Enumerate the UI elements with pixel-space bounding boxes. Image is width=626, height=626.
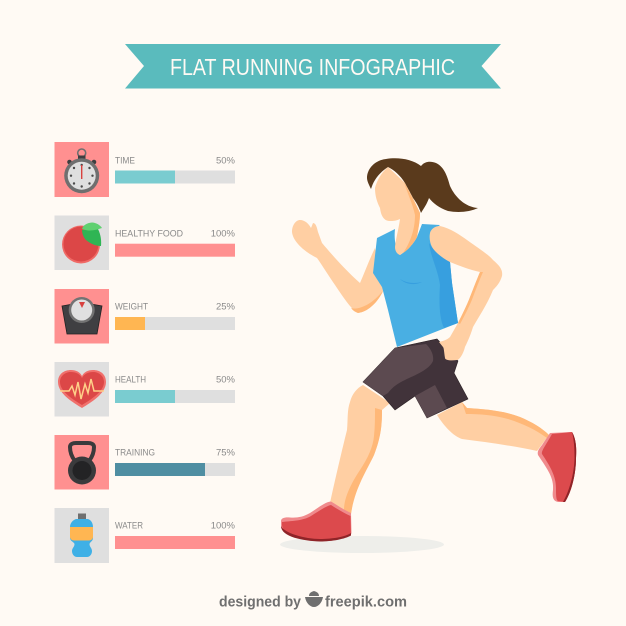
icon: freepik logo <box>305 591 323 607</box>
shorts <box>363 339 468 418</box>
row: time <box>54 142 236 197</box>
row: health: HEALTH <box>115 374 146 386</box>
near arm <box>430 226 502 360</box>
row: water <box>54 508 236 563</box>
icon: scale <box>62 297 102 334</box>
row: healthy food <box>54 216 236 270</box>
icon: stopwatch <box>64 149 99 193</box>
back leg <box>437 402 549 451</box>
row: training <box>54 435 236 490</box>
front leg <box>330 385 390 514</box>
row: health <box>54 362 236 416</box>
footer credit: designed by <box>219 594 301 610</box>
row: weight: 25% <box>216 302 236 312</box>
runner figure <box>280 158 576 553</box>
footer credit: freepik.com <box>325 594 407 610</box>
row: time: TIME <box>115 156 135 166</box>
row: healthy food: 100% <box>211 228 236 240</box>
row: water: 100% <box>211 520 236 532</box>
row: weight <box>54 289 236 344</box>
row: training: TRAINING <box>115 448 155 458</box>
far arm <box>292 220 383 313</box>
footer credit <box>219 591 407 610</box>
row: healthy food: HEALTHY FOOD <box>115 228 183 240</box>
back shoe <box>538 432 576 502</box>
front shoe <box>281 502 352 542</box>
row: health: 50% <box>216 374 236 386</box>
icon: heart with pulse <box>58 370 106 408</box>
row: weight: WEIGHT <box>115 302 148 312</box>
ground shadow <box>280 536 444 553</box>
icon: apple <box>62 222 102 264</box>
row: time: 50% <box>216 156 236 166</box>
head and neck <box>375 167 420 255</box>
row: water: WATER <box>115 520 143 532</box>
icon: water bottle <box>70 514 93 557</box>
title banner <box>125 44 501 88</box>
row: training: 75% <box>216 448 236 458</box>
torso: blue tank top <box>373 224 458 347</box>
hair with ponytail <box>367 158 478 213</box>
icon: kettlebell <box>68 443 96 484</box>
title: FLAT RUNNING INFOGRAPHIC <box>170 54 455 80</box>
